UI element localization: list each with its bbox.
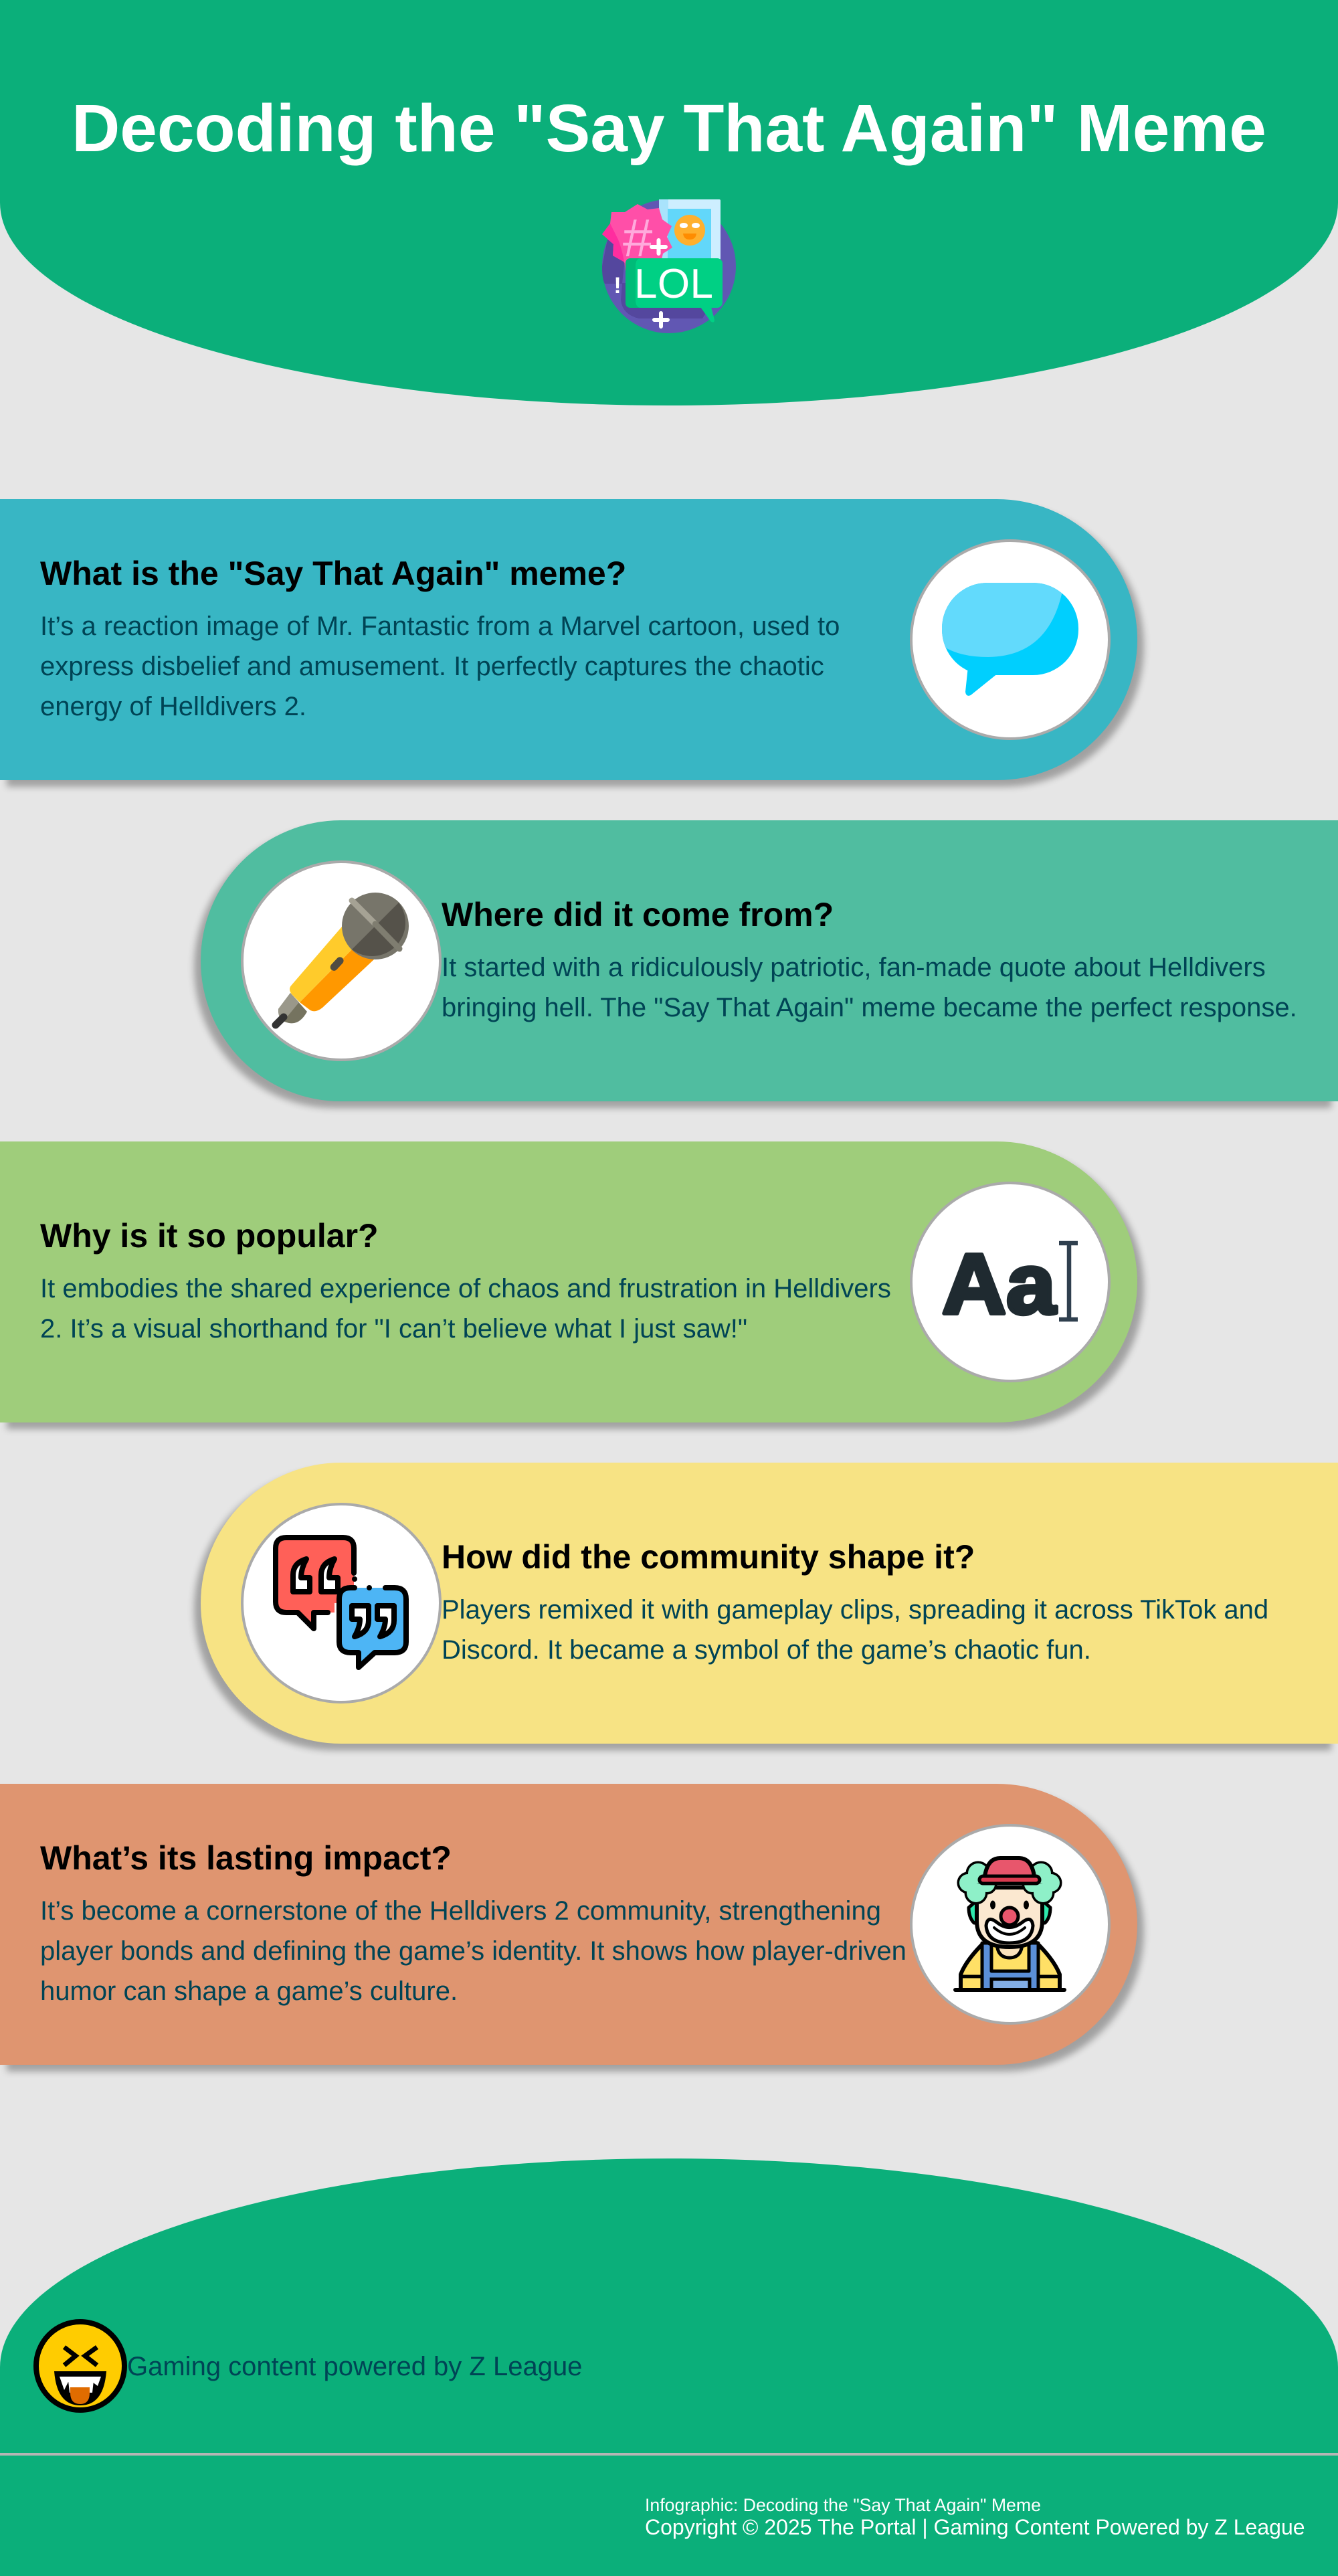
text block: [40, 1839, 906, 2006]
title: Decoding the "Say That Again" Meme: [72, 91, 1266, 166]
text block: [442, 1538, 1268, 1665]
text block: 2. It’s a visual shorthand for "I can’t believe what I just saw!": [40, 1314, 747, 1344]
text block: [40, 1217, 891, 1344]
icon: Aa text cursor: [910, 1182, 1111, 1382]
text block: [40, 555, 840, 721]
credits: Infographic: Decoding the "Say That Again" Meme: [645, 2495, 1041, 2515]
panel: lasting impact: [0, 1784, 1137, 2065]
panel: footer: [0, 2158, 1338, 2576]
text block: It started with a ridiculously patriotic, fan-made quote about Helldivers: [442, 953, 1266, 982]
panel: what is the meme: [0, 499, 1137, 780]
icon: laughing emoji: [33, 2319, 127, 2413]
icon: speech bubble: [910, 539, 1111, 740]
text block: Where did it come from?: [442, 896, 834, 933]
credits: Copyright © 2025 The Portal | Gaming Content Powered by Z League: [645, 2515, 1305, 2539]
attribution text: Gaming content powered by Z League: [127, 2352, 582, 2381]
text block: It embodies the shared experience of chaos and frustration in Helldivers: [40, 1274, 891, 1303]
icon: microphone: [241, 860, 442, 1061]
icon: LOL social media badge: !: [613, 273, 622, 298]
icon: Aa text cursor: Aa: [942, 1236, 1056, 1332]
credits: [645, 2495, 1305, 2539]
panel: where did it come from: [201, 820, 1338, 1101]
text block: Discord. It became a symbol of the game’s chaotic fun.: [442, 1635, 1091, 1665]
text block: It’s become a cornerstone of the Helldivers 2 community, strengthening: [40, 1896, 881, 1926]
text block: [442, 896, 1297, 1022]
text block: energy of Helldivers 2.: [40, 692, 306, 721]
text block: It’s a reaction image of Mr. Fantastic from a Marvel cartoon, used to: [40, 612, 840, 641]
text block: Why is it so popular?: [40, 1217, 379, 1255]
icon: quote bubbles: [241, 1503, 442, 1704]
text block: bringing hell. The "Say That Again" meme became the perfect response.: [442, 993, 1297, 1022]
icon: clown: [910, 1824, 1111, 2025]
text block: How did the community shape it?: [442, 1538, 975, 1576]
text block: player bonds and defining the game’s identity. It shows how player-driven: [40, 1936, 906, 1966]
panel: header: [0, 0, 1338, 405]
text block: humor can shape a game’s culture.: [40, 1976, 458, 2006]
divider: [0, 2453, 1338, 2456]
icon: LOL social media badge: [602, 199, 736, 333]
icon: LOL social media badge: #: [622, 208, 653, 268]
text block: Players remixed it with gameplay clips, spreading it across TikTok and: [442, 1595, 1268, 1625]
panel: community: [201, 1463, 1338, 1744]
panel: why so popular: [0, 1141, 1137, 1422]
icon: LOL social media badge: LOL: [634, 261, 713, 307]
text block: What is the "Say That Again" meme?: [40, 555, 626, 592]
text block: What’s its lasting impact?: [40, 1839, 452, 1877]
text block: express disbelief and amusement. It perfectly captures the chaotic: [40, 652, 824, 681]
